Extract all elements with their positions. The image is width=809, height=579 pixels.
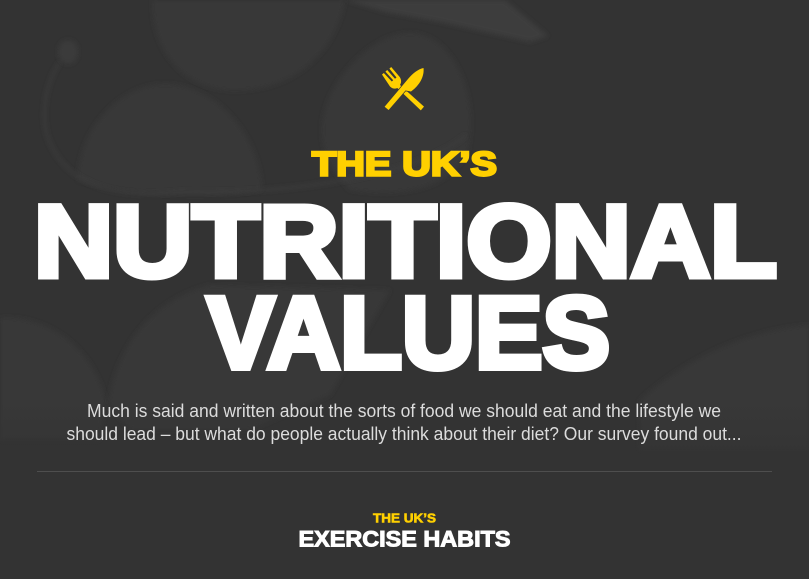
icon: crossed knife and fork <box>382 67 424 110</box>
title: VALUES: VALUES <box>207 276 610 390</box>
intro text block: Much is said and written about the sorts of food we should eat and the lifestyle we <box>87 401 721 421</box>
icon part: fork <box>382 67 424 110</box>
intro text block: should lead – but what do people actually think about their diet? Our survey found out... <box>66 424 742 444</box>
footer heading: THE UK'S EXERCISE HABITS <box>298 512 510 552</box>
footer heading: THE UK'S EXERCISE HABITS: THE UK’S <box>373 512 436 526</box>
intro text block <box>66 401 742 444</box>
divider <box>37 471 772 472</box>
title: NUTRITIONAL: NUTRITIONAL <box>34 184 777 298</box>
footer heading: THE UK'S EXERCISE HABITS: EXERCISE HABITS <box>298 527 510 552</box>
icon part: knife <box>385 68 424 110</box>
heading: THE UK'S: THE UK’S <box>312 146 497 184</box>
